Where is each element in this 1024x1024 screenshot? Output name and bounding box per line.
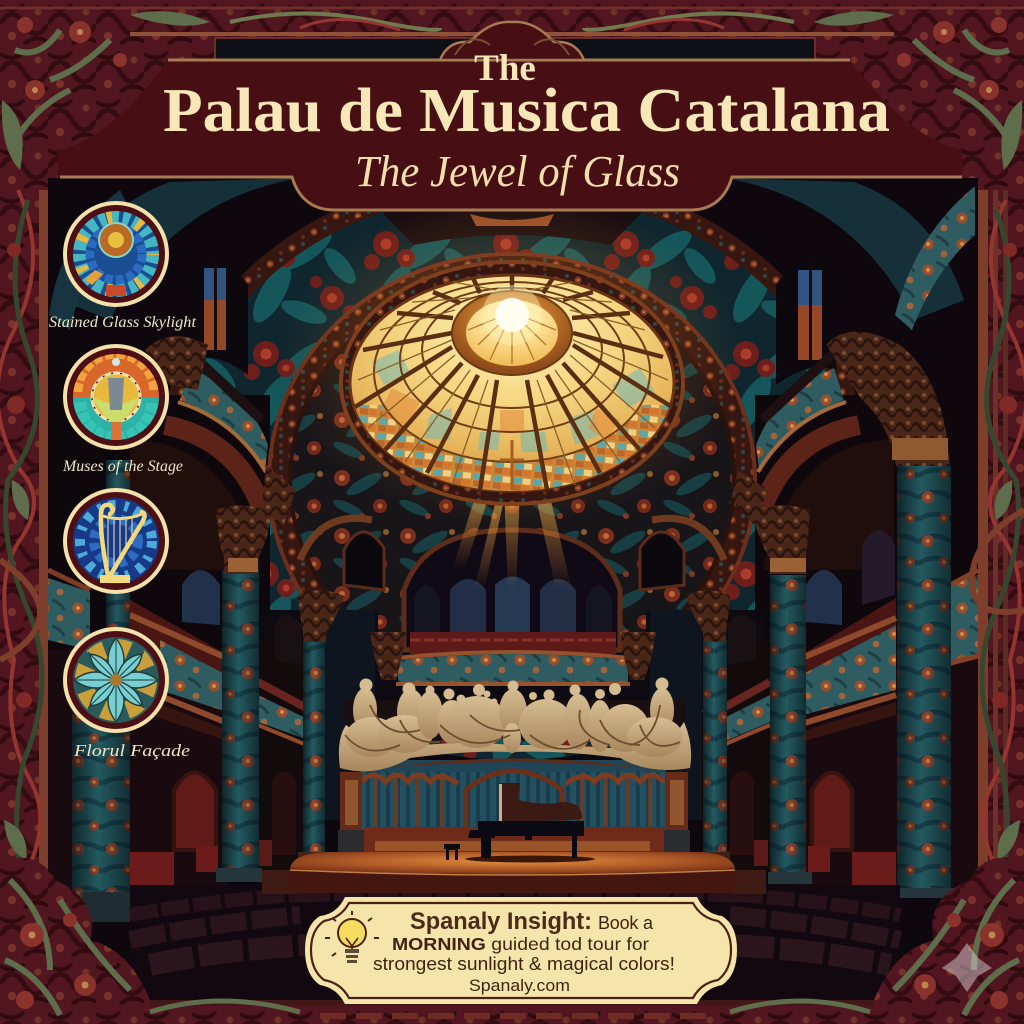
medallion: harp [65, 490, 167, 592]
lower vault and inner arches [296, 514, 728, 652]
radiant light rays [454, 502, 570, 584]
main arch band around dome [260, 254, 765, 710]
hall interior scene [48, 178, 978, 1008]
top centre border scrolls [230, 13, 794, 30]
column capitals [145, 332, 950, 680]
callout text [373, 908, 675, 995]
upper vault with floral mosaic [49, 178, 975, 760]
callout text: MORNING guided tod tour for [392, 934, 649, 954]
stage floor [290, 852, 735, 893]
label: Muses of the Stage: Muses of the Stage [62, 458, 183, 475]
left border vine [0, 100, 42, 900]
dark side wings of hall [158, 395, 866, 640]
side aisles lower walls [48, 610, 978, 890]
callout text: strongest sunlight & magical colors! [373, 954, 675, 974]
lower left balcony [48, 570, 314, 748]
title heading [163, 48, 890, 145]
sculpture frieze of muses [339, 678, 691, 771]
callout text: Book a [598, 913, 654, 933]
grand piano with bench [444, 783, 595, 862]
dark strip above banner [215, 38, 815, 62]
right border vine [972, 100, 1024, 900]
glow around dome [304, 212, 720, 509]
upper left balcony [130, 355, 268, 570]
label: Stained Glass Skylight: Stained Glass Skylight [49, 314, 197, 331]
top-right corner floral ornament [814, 11, 1014, 150]
proscenium and curtains [338, 758, 690, 854]
columns [72, 460, 954, 922]
callout text: Spanaly Insight: [410, 908, 592, 935]
bottom-right corner floral ornament [874, 858, 1024, 1024]
seating rows [128, 870, 902, 976]
stained-glass dome skylight [341, 262, 683, 504]
medallion: floral facade [65, 629, 167, 731]
callout: Spanaly Insight [305, 897, 737, 1004]
title heading: The [474, 48, 536, 89]
medallion: stained glass skylight [65, 203, 167, 305]
bottom-left corner floral ornament [0, 858, 150, 1024]
title banner [58, 22, 962, 212]
lower right balcony [716, 570, 978, 748]
upper side windows [188, 260, 836, 385]
top-left corner floral ornament [10, 11, 210, 150]
side arches and windows [130, 530, 896, 886]
upper right balcony [756, 355, 894, 570]
subtitle: The Jewel of Glass [355, 147, 680, 196]
title heading: Palau de Musica Catalana [163, 77, 890, 145]
medallion: muses of the stage [65, 346, 167, 448]
callout text: Spanaly.com [469, 976, 570, 995]
label: Florul Facade: Florul Façade [73, 741, 191, 760]
icon: light bulb [325, 911, 379, 963]
back gallery with windows [396, 576, 630, 684]
watermark star [942, 943, 992, 992]
bottom border scrolls [150, 1001, 870, 1016]
